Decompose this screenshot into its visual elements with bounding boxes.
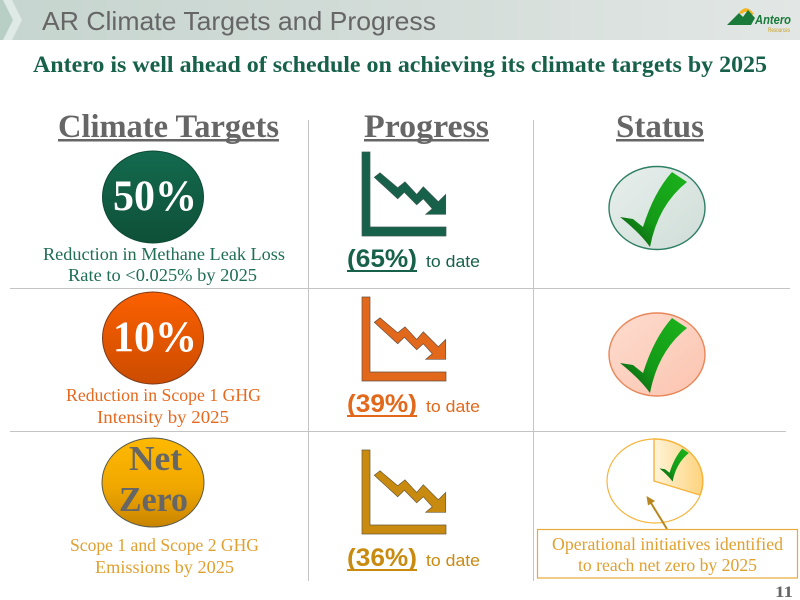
target 1: 50% circle: 50% [113, 173, 197, 220]
heading: Status: Status [616, 109, 704, 145]
icon: declining chart gold [362, 450, 446, 534]
heading: Progress: Progress [364, 109, 489, 145]
target 3 description: Scope 1 and Scope 2 GHG [70, 535, 259, 555]
target 1 description: Rate to <0.025% by 2025 [68, 265, 257, 285]
target 2 description: Reduction in Scope 1 GHG [66, 385, 261, 405]
progress 2: 39% to date [347, 390, 480, 418]
target 1: 50% circle [102, 151, 204, 243]
target 2: 10% circle [102, 292, 204, 384]
callout: operational initiatives: Operational initiatives identified [552, 534, 783, 554]
progress 1: 65% to date [347, 245, 480, 273]
title: AR Climate Targets and Progress [42, 6, 436, 36]
icon: Antero logo [727, 8, 791, 34]
status 2: orange check circle [609, 313, 705, 396]
target 3: Net Zero circle [102, 438, 204, 527]
target 1 description [43, 244, 285, 285]
arrow: callout to pie [646, 496, 667, 529]
target 3 description: Emissions by 2025 [95, 557, 234, 577]
progress 1: 65% to date: (65%) [347, 245, 417, 273]
callout: operational initiatives: to reach net zero by 2025 [578, 555, 757, 575]
target 3: Net Zero circle: Zero [119, 480, 188, 519]
progress 3: 36% to date: to date [426, 551, 480, 570]
subtitle: Antero is well ahead of schedule on achieving its climate targets by 2025 [33, 52, 767, 77]
target 3 description [70, 535, 259, 577]
progress 1: 65% to date: to date [426, 252, 480, 271]
progress 3: 36% to date: (36%) [347, 544, 417, 572]
heading: Climate Targets: Climate Targets [58, 109, 279, 145]
progress 3: 36% to date [347, 544, 480, 572]
icon: declining chart orange [362, 297, 446, 381]
icon: declining chart green [362, 152, 446, 236]
grid lines [10, 120, 790, 581]
icon: Antero logo: Resources [768, 28, 790, 34]
status 3: partial pie with check [607, 439, 703, 523]
progress 2: 39% to date: to date [426, 397, 480, 416]
target 2 description: Intensity by 2025 [97, 407, 229, 427]
target 2 description [66, 385, 261, 427]
icon: Antero logo: Antero [754, 12, 791, 27]
target 3: Net Zero circle: Net [129, 439, 182, 478]
callout: operational initiatives [538, 530, 798, 578]
progress 2: 39% to date: (39%) [347, 390, 417, 418]
status 1: green check circle [609, 166, 705, 250]
header band [0, 0, 800, 40]
target 2: 10% circle: 10% [113, 314, 197, 361]
target 1 description: Reduction in Methane Leak Loss [43, 244, 285, 264]
